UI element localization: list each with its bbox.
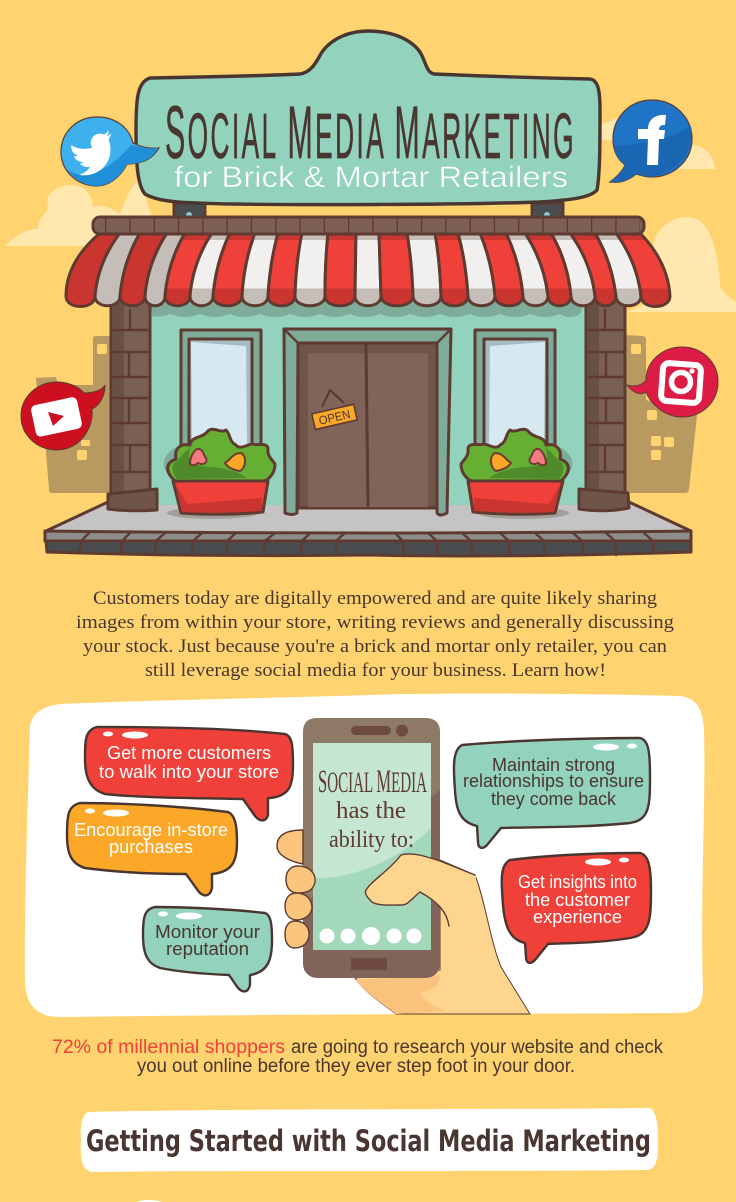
- background buildings: [36, 335, 697, 493]
- phone text: [329, 798, 414, 853]
- bubble: monitor reputation: reputation: [166, 938, 249, 959]
- phone text: has the: [336, 798, 406, 824]
- next section sliver: [136, 1200, 162, 1202]
- building windows: [77, 344, 674, 460]
- sign: [136, 31, 600, 205]
- open sign: OPEN: [317, 407, 352, 428]
- phone: [303, 718, 440, 978]
- flowers: [190, 449, 207, 465]
- awning stripes: [66, 233, 670, 306]
- bubble: customer insights: the customer: [525, 889, 630, 910]
- shadow: [167, 507, 259, 519]
- bubble: maintain relationships: relationships to ensure: [463, 770, 644, 791]
- intro paragraph: images from within your store, writing reviews and generally discussing: [76, 612, 675, 633]
- hand thumb: [365, 854, 476, 960]
- millennial statistic: [52, 1037, 663, 1077]
- sign board: [136, 31, 600, 205]
- intro paragraph: [76, 588, 675, 681]
- right pillar: [579, 300, 629, 511]
- bubble: in-store purchases: Encourage in-store: [74, 819, 228, 840]
- door panels: [298, 343, 437, 508]
- hand fingers: [277, 830, 315, 948]
- millennial statistic: you out online before they ever step foot in your door.: [137, 1056, 575, 1077]
- millennial statistic: are going to research your website and check: [291, 1037, 663, 1058]
- icon: twitter bubble: [61, 117, 159, 186]
- bubble: more customers: to walk into your store: [99, 761, 279, 782]
- left planter: [164, 429, 275, 519]
- sign brackets: [174, 203, 563, 219]
- bubble: more customers: Get more customers: [107, 742, 271, 763]
- pot: [173, 481, 268, 514]
- right window: [475, 330, 555, 450]
- bush: [168, 429, 275, 481]
- door frame: [284, 329, 451, 515]
- millennial statistic: 72% of millennial shoppers: [52, 1037, 285, 1058]
- floor: [45, 502, 691, 556]
- intro paragraph: your stock. Just because you're a brick and mortar only retailer, you can: [83, 636, 668, 657]
- intro paragraph: still leverage social media for your business. Learn how!: [145, 660, 606, 681]
- screen dots: [320, 927, 422, 945]
- bubble: in-store purchases: [67, 803, 237, 895]
- bubble: maintain relationships: [454, 738, 650, 848]
- clouds: [5, 115, 736, 312]
- awning roof bar: [93, 217, 644, 234]
- left pillar: [108, 300, 157, 511]
- section heading: [81, 1108, 658, 1172]
- bubble: customer insights: experience: [533, 906, 622, 927]
- hand palm: [355, 860, 530, 1014]
- awning: [66, 217, 670, 306]
- intro paragraph: Customers today are digitally empowered and are quite likely sharing: [93, 588, 658, 609]
- bubble: maintain relationships: Maintain strong: [492, 754, 615, 775]
- bubble: customer insights: Get insights into: [518, 871, 637, 892]
- phone text: ability to:: [329, 827, 414, 853]
- bubble: maintain relationships: they come back: [491, 788, 617, 809]
- left window: [181, 330, 261, 450]
- right planter: [461, 429, 572, 519]
- bubble: in-store purchases: purchases: [109, 836, 193, 857]
- bubble: customer insights: [502, 853, 651, 963]
- bubble: monitor reputation: [143, 907, 272, 991]
- wall: [150, 300, 586, 505]
- bubble: more customers: [85, 727, 293, 820]
- phone heading: SOCIAL MEDIA: [318, 764, 427, 800]
- open sign: [312, 390, 357, 430]
- storefront: [45, 203, 691, 556]
- icon: facebook bubble: [610, 100, 692, 182]
- subtitle: for Brick & Mortar Retailers: [174, 161, 568, 194]
- bubble: monitor reputation: Monitor your: [155, 921, 260, 942]
- panel: social media abilities: [25, 694, 704, 1017]
- icon: youtube bubble: [21, 382, 105, 450]
- icon: instagram bubble: [627, 347, 718, 417]
- panel background: [25, 694, 704, 1017]
- phone screen: [313, 743, 431, 950]
- awning shadow: [150, 300, 586, 317]
- door: [284, 329, 451, 515]
